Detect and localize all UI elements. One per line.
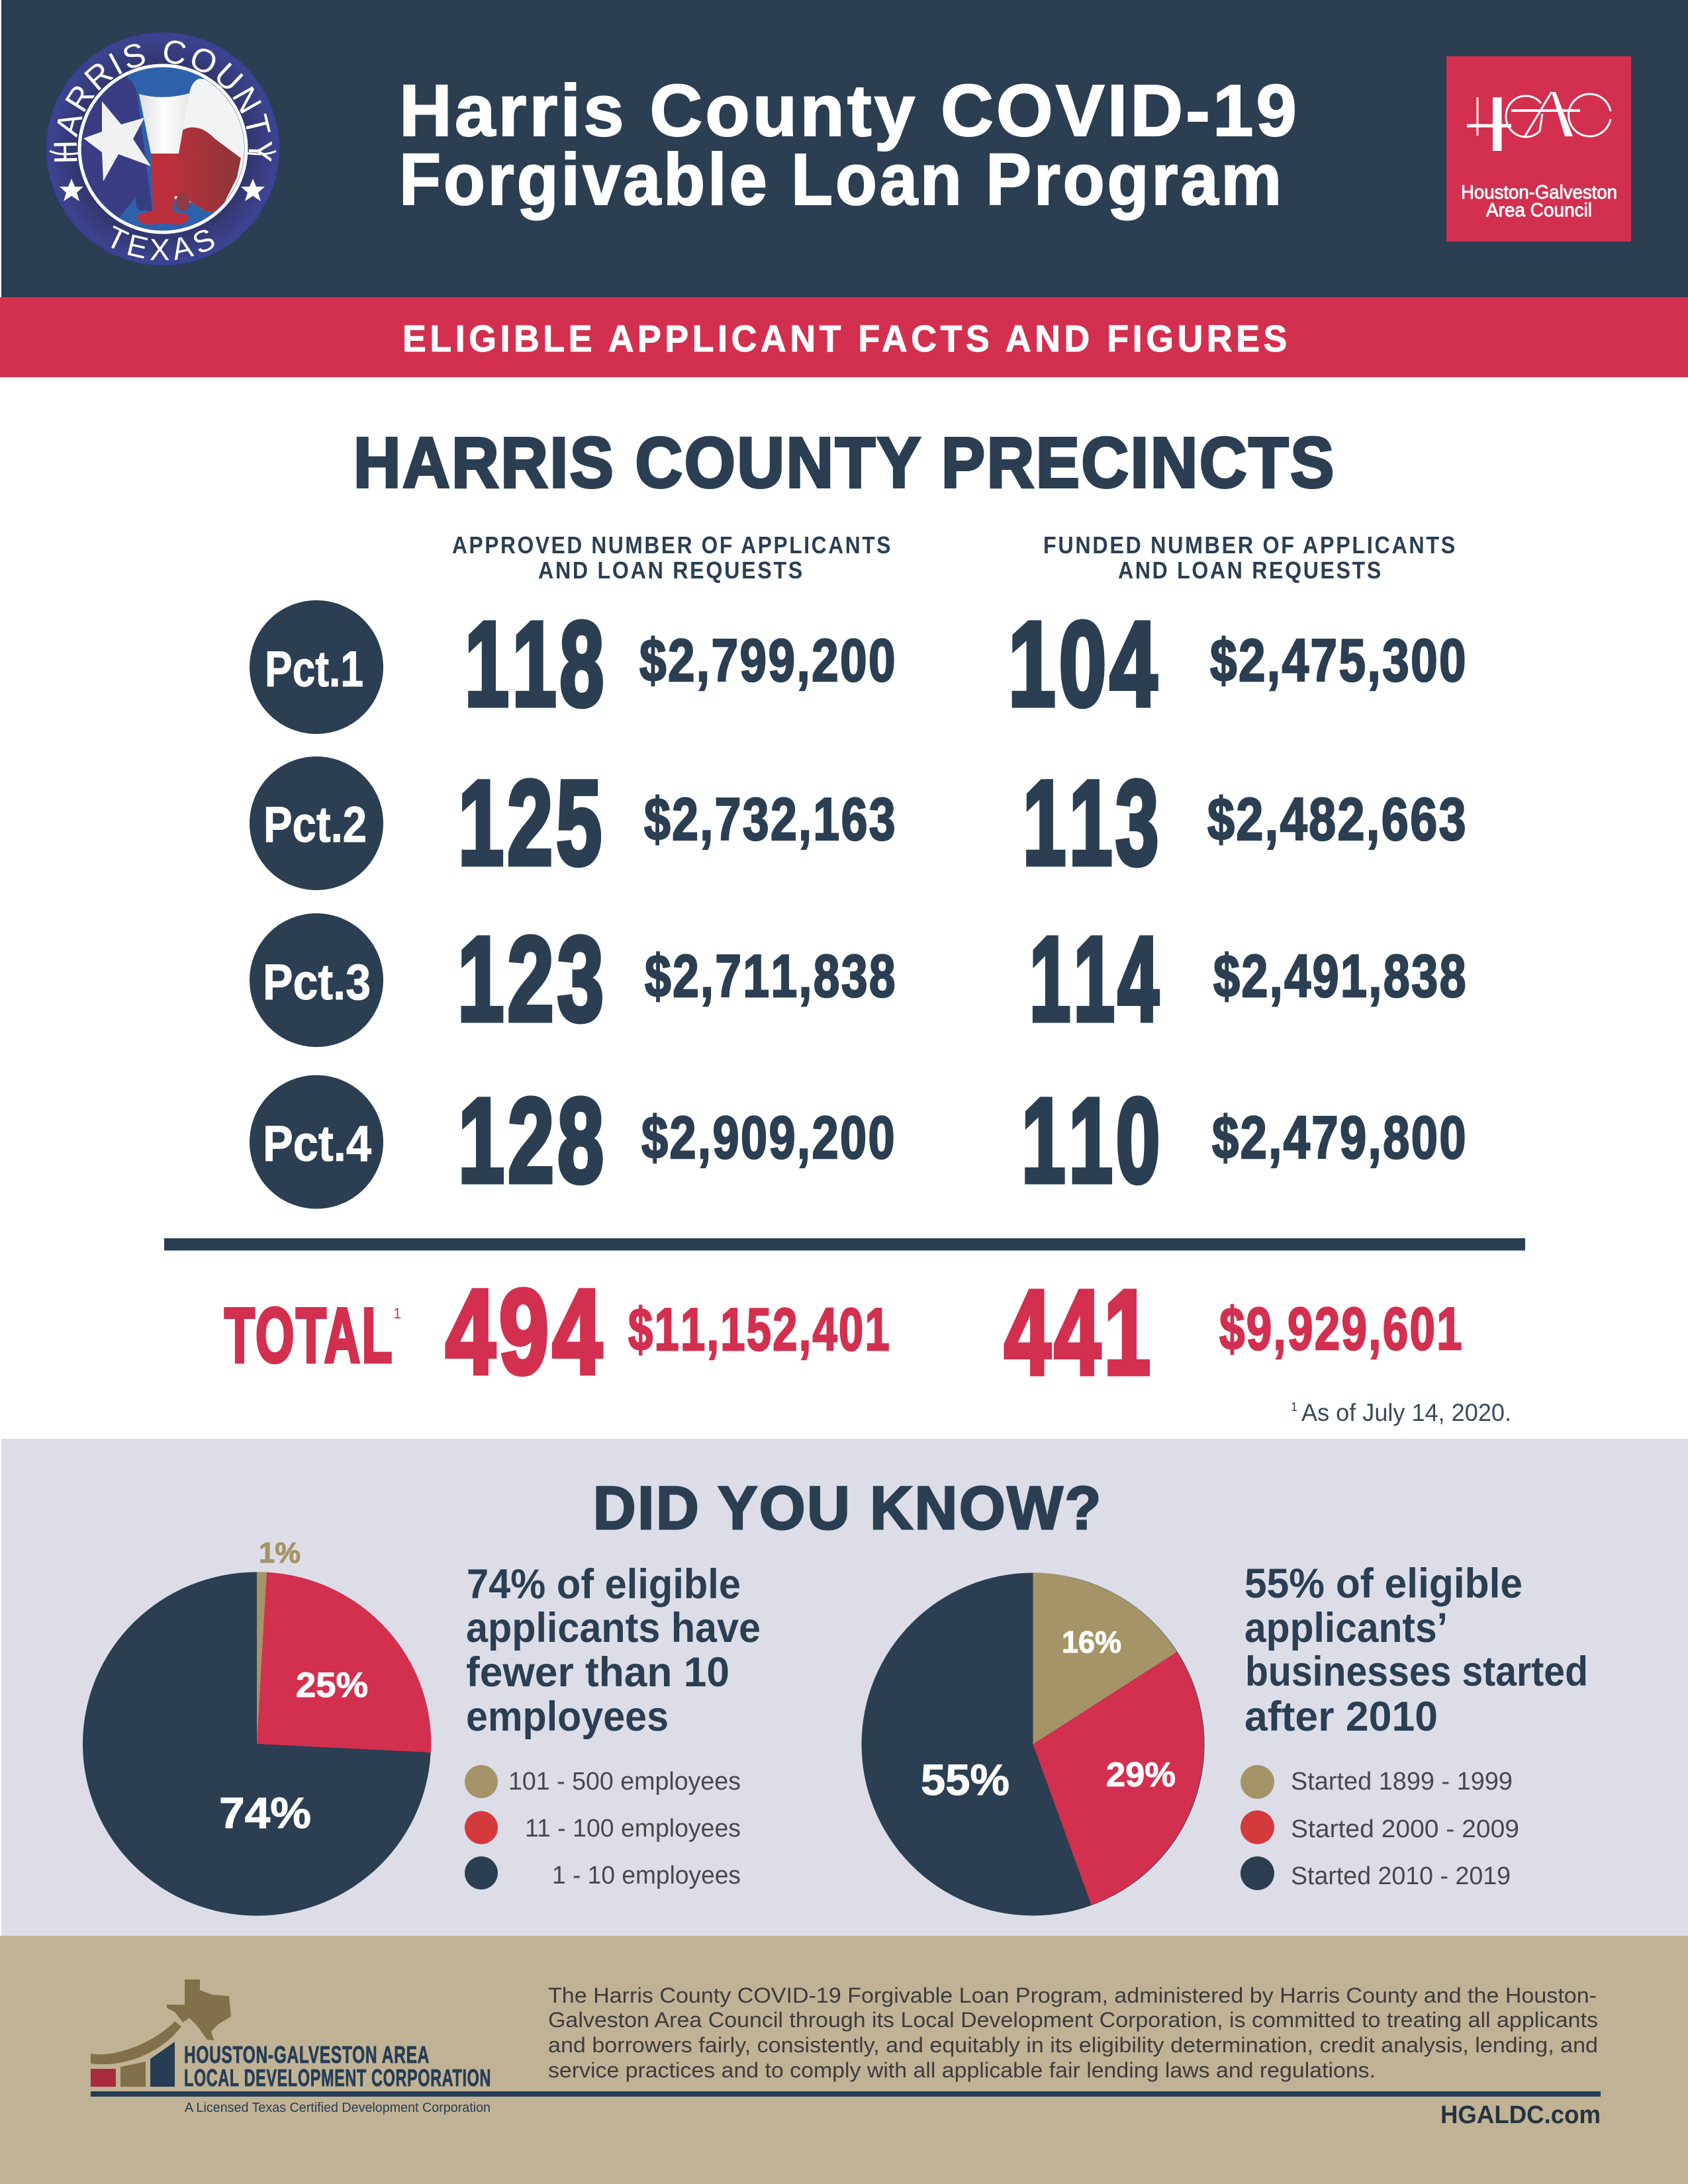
- heading: Harris County Precincts: HARRIS COUNTY PRECINCTS: [353, 422, 1336, 502]
- icon: HGALDC logo: LOCAL DEVELOPMENT CORPORATION: [184, 2064, 491, 2091]
- icon: HGALDC logo: A Licensed Texas Certified Development Corporation: [185, 2101, 491, 2115]
- legend: business start date: Started 2010 - 2019: [1291, 1862, 1511, 1890]
- pie chart: employees: [83, 1537, 431, 1916]
- legend: employees: 101 - 500 employees: [508, 1768, 741, 1796]
- footnote: As of July 14, 2020.: [1301, 1399, 1511, 1426]
- icon: H-GAC logo: Area Council: [1486, 200, 1592, 221]
- badge: Pct.2: Pct.2: [263, 797, 367, 853]
- text: 55% callout: after 2010: [1244, 1694, 1438, 1740]
- panel: header banner: [1, 0, 1688, 297]
- column heading: funded: [1043, 531, 1457, 584]
- pie chart: business start date: [862, 1572, 1205, 1915]
- legend: employees: 1 - 10 employees: [552, 1862, 741, 1889]
- title: [399, 70, 1299, 220]
- text: program statement: [548, 1983, 1598, 2082]
- row: totals: 494: [445, 1264, 606, 1399]
- text: 74% callout: applicants have: [466, 1605, 761, 1651]
- icon: HGALDC logo: HOUSTON-GALVESTON AREA: [184, 2041, 430, 2068]
- row: precinct 3: 114: [1029, 911, 1162, 1046]
- row: precinct 3: [250, 911, 1468, 1047]
- row: precinct 2: 113: [1023, 755, 1162, 890]
- text: 74% callout: 74% of eligible: [467, 1561, 741, 1608]
- text: 74% callout: fewer than 10: [466, 1649, 729, 1696]
- icon: HGALDC logo: [91, 1979, 491, 2115]
- panel: footer: [0, 1936, 1688, 2184]
- icon: Harris County Texas seal: HARRIS COUNTY: [54, 40, 272, 161]
- row: precinct 2: $2,732,163: [644, 786, 897, 853]
- row: totals: 441: [1004, 1265, 1154, 1400]
- row: precinct 4: 128: [458, 1073, 607, 1208]
- row: precinct 4: [250, 1073, 1468, 1208]
- text: 74% callout: [466, 1561, 761, 1740]
- icon: H-GAC logo: [1446, 56, 1631, 242]
- pie chart: employees: 74%: [219, 1788, 311, 1837]
- badge: Pct.3: Pct.3: [263, 954, 371, 1011]
- icon: Harris County Texas seal: TEXAS: [111, 225, 214, 261]
- text: 74% callout: employees: [466, 1694, 669, 1740]
- row: totals: [224, 1264, 1464, 1400]
- text: 55% callout: [1244, 1561, 1588, 1740]
- icon: H-GAC logo: Houston-Galveston: [1461, 182, 1617, 203]
- pie chart: business start date: 16%: [1062, 1625, 1121, 1659]
- row: precinct 3: 123: [457, 911, 607, 1046]
- title: Harris County COVID-19: [399, 70, 1299, 152]
- pie chart: business start date: 29%: [1106, 1756, 1176, 1794]
- row: totals: 1: [393, 1305, 401, 1322]
- badge: Pct.4: Pct.4: [263, 1116, 371, 1172]
- text: website: HGALDC.com: [1440, 2101, 1601, 2129]
- column heading: approved: AND LOAN REQUESTS: [538, 557, 804, 584]
- row: totals: TOTAL: [224, 1292, 394, 1379]
- legend: business start date: Started 1899 - 1999: [1291, 1768, 1513, 1796]
- row: totals: $11,152,401: [628, 1297, 891, 1363]
- title: Forgivable Loan Program: [399, 139, 1284, 220]
- row: precinct 3: $2,711,838: [645, 943, 897, 1010]
- row: precinct 4: $2,479,800: [1212, 1105, 1468, 1171]
- footnote: 1: [1291, 1400, 1297, 1414]
- column heading: funded: FUNDED NUMBER OF APPLICANTS: [1043, 531, 1457, 559]
- row: precinct 2: [250, 755, 1468, 890]
- column heading: funded: AND LOAN REQUESTS: [1118, 557, 1383, 584]
- pie chart: business start date: 55%: [921, 1755, 1009, 1804]
- heading: did you know: DID YOU KNOW?: [593, 1475, 1103, 1542]
- badge: Pct.2: [250, 756, 383, 890]
- column heading: approved: APPROVED NUMBER OF APPLICANTS: [452, 531, 892, 559]
- legend: business start date: [1241, 1765, 1519, 1890]
- row: totals: $9,929,601: [1219, 1296, 1464, 1363]
- text: program statement: Galveston Area Council through its Local Development Corporation, is committed to treating all applicants: [548, 2008, 1598, 2032]
- column heading: approved: [452, 531, 892, 584]
- row: precinct 4: 110: [1021, 1073, 1163, 1208]
- legend: employees: [465, 1765, 741, 1889]
- row: precinct 2: 125: [458, 755, 605, 890]
- badge: Pct.1: Pct.1: [265, 641, 363, 698]
- badge: Pct.4: [250, 1075, 383, 1208]
- row: precinct 3: $2,491,838: [1213, 943, 1468, 1010]
- legend: business start date: Started 2000 - 2009: [1291, 1815, 1519, 1843]
- panel: red subtitle band: ELIGIBLE APPLICANT FACTS AND FIGURES: [402, 318, 1291, 360]
- legend: employees: 11 - 100 employees: [525, 1815, 741, 1843]
- row: precinct 4: $2,909,200: [641, 1105, 896, 1171]
- panel: red subtitle band: [0, 297, 1688, 377]
- text: 55% callout: applicants’: [1244, 1605, 1448, 1651]
- text: 55% callout: 55% of eligible: [1244, 1561, 1523, 1607]
- row: precinct 1: 118: [465, 596, 607, 731]
- row: precinct 1: [250, 596, 1468, 734]
- text: program statement: and borrowers fairly, consistently, and equitably in its eligibility determination, credit analysis, lending, and: [548, 2033, 1598, 2057]
- icon: Harris County Texas seal: [46, 32, 279, 265]
- pie chart: employees: 1%: [259, 1537, 301, 1569]
- text: 55% callout: businesses started: [1245, 1649, 1588, 1695]
- text: program statement: The Harris County COVID-19 Forgivable Loan Program, administered by Harris County and the Houston-: [548, 1983, 1597, 2007]
- text: program statement: service practices and to comply with all applicable fair lending laws and regulations.: [548, 2058, 1376, 2082]
- panel: did you know: [1, 1439, 1688, 1936]
- row: precinct 2: $2,482,663: [1207, 786, 1468, 853]
- row: precinct 1: $2,799,200: [639, 627, 897, 694]
- badge: Pct.1: [250, 600, 383, 734]
- pie chart: employees: 25%: [296, 1666, 368, 1705]
- badge: Pct.3: [250, 913, 383, 1047]
- row: precinct 1: 104: [1008, 596, 1160, 731]
- row: precinct 1: $2,475,300: [1210, 627, 1468, 694]
